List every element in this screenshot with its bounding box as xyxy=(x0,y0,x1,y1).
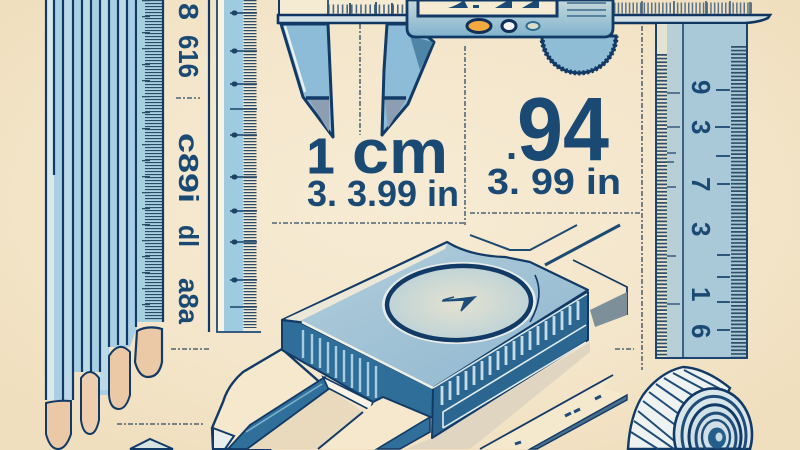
right ruler: 1 xyxy=(686,287,716,301)
measurement: 1 cm: 1 xyxy=(307,130,334,184)
tape measure device xyxy=(282,242,588,438)
tick ruler xyxy=(137,0,163,322)
wheel xyxy=(542,36,616,73)
rotated ruler numbers: c89i xyxy=(173,133,204,203)
rotated ruler numbers: a8a xyxy=(173,278,204,324)
left striped rulers with skin-coloured tips xyxy=(46,0,163,449)
right ruler: 3 xyxy=(686,120,716,134)
measurement: .94: . xyxy=(506,124,517,168)
measurement: .94 xyxy=(487,80,621,202)
right ruler: 3 xyxy=(686,222,716,236)
rotated ruler numbers: dl xyxy=(173,225,204,247)
measuring tape roll xyxy=(628,367,752,449)
small diamond marker xyxy=(130,439,173,449)
stripes xyxy=(46,0,137,400)
finger tips xyxy=(46,401,71,449)
rotated ruler numbers: 8 xyxy=(173,3,204,20)
right ruler: 6 xyxy=(686,324,716,338)
measurement: 1 cm: cm xyxy=(352,118,448,187)
dashed guide lines xyxy=(117,24,642,424)
lower caliper legs xyxy=(212,342,590,449)
buttons xyxy=(467,20,540,32)
upper scale xyxy=(280,0,406,14)
measurement: .94: 3. 99 in xyxy=(487,161,621,202)
background strap shapes xyxy=(470,225,627,327)
top surface xyxy=(282,242,588,388)
display xyxy=(418,0,557,16)
right side face xyxy=(432,292,588,438)
main beam xyxy=(278,15,770,23)
rotated ruler numbers: 616 xyxy=(173,35,204,78)
head xyxy=(407,0,613,37)
right ruler: 7 xyxy=(686,177,716,191)
right jaw xyxy=(382,24,434,135)
left side face xyxy=(282,320,433,418)
right ruler: 9 xyxy=(686,80,716,94)
rotated ruler numbers xyxy=(173,3,204,324)
measurement: .94: 94 xyxy=(517,80,609,180)
measurement: 1 cm xyxy=(307,118,459,214)
caliper xyxy=(278,0,770,137)
dial ring xyxy=(381,259,537,347)
middle ruler xyxy=(209,0,261,332)
measurement: 1 cm: 3. 3.99 in xyxy=(307,173,459,214)
right ruler xyxy=(656,24,747,358)
small ruler strip xyxy=(480,375,627,449)
left jaw xyxy=(281,24,333,137)
